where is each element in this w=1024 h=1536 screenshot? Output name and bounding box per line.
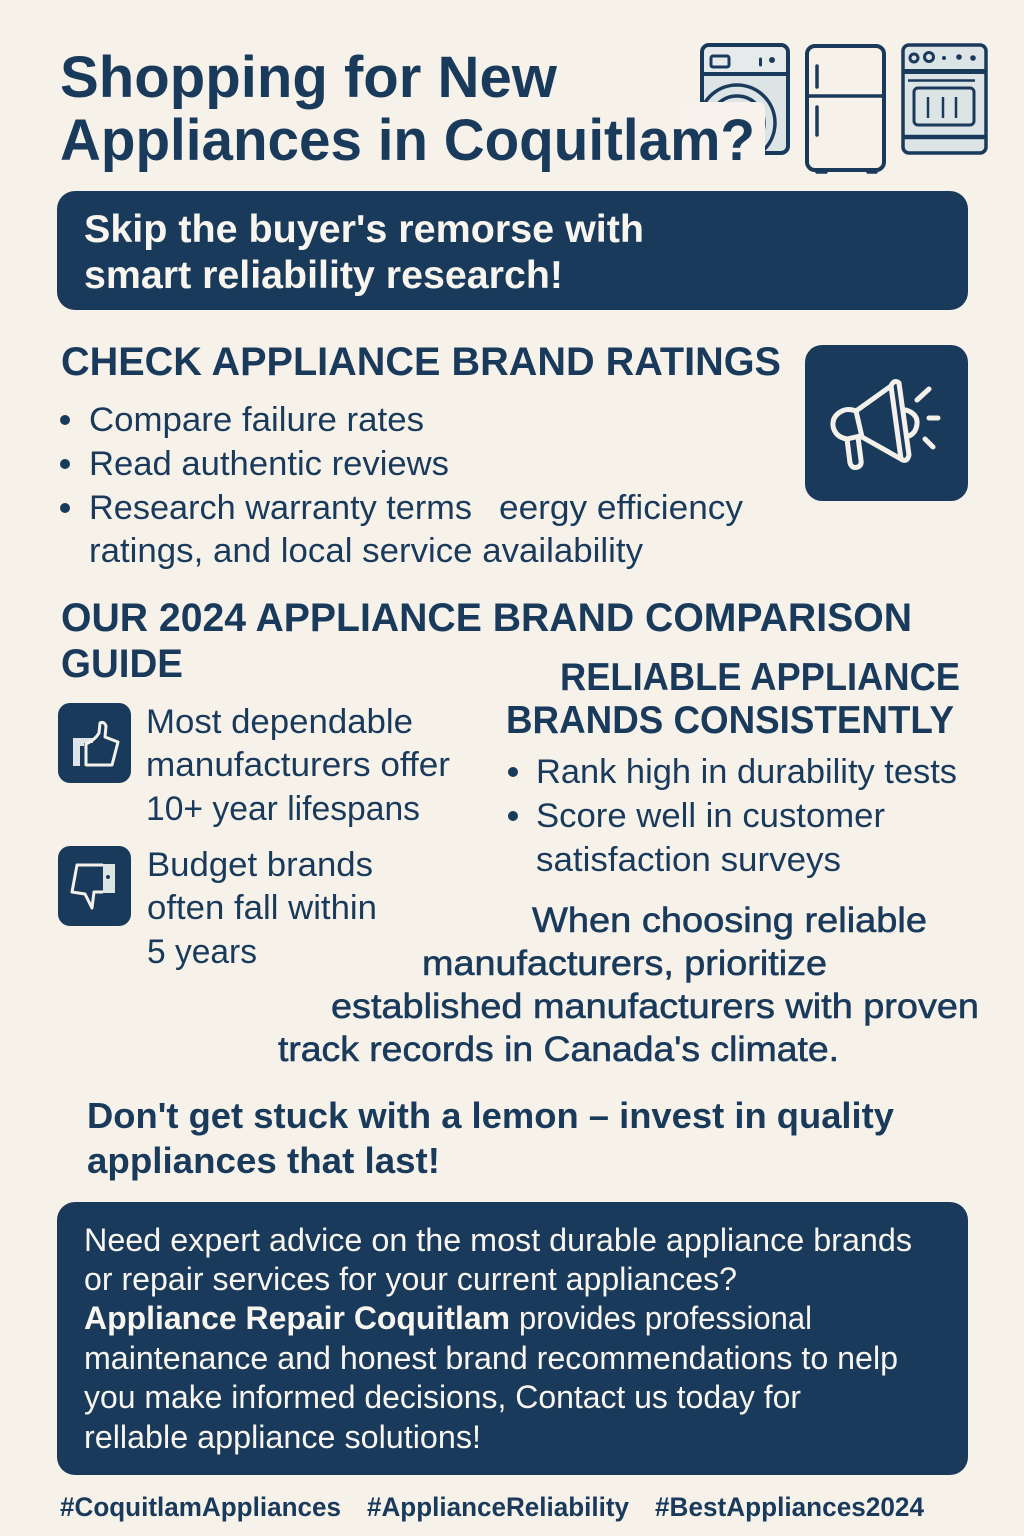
- text: budget brands: often fall within: [147, 889, 377, 927]
- text: choosing reliable manufacturers: track records in Canada's climate.: [278, 1030, 839, 1069]
- panel: contact call to action: Appliance Repair Coquitlam: [84, 1300, 510, 1336]
- list: brand rating tips: Read authentic reviews: [89, 445, 449, 483]
- heading: reliable appliance brands: BRANDS CONSISTENTLY: [506, 699, 954, 742]
- list: reliable brand traits: [508, 753, 957, 879]
- icon: thumbs down: [58, 846, 131, 926]
- banner: skip the buyer's remorse: [57, 191, 968, 310]
- heading: 2024 comparison guide: OUR 2024 APPLIANCE BRAND COMPARISON: [61, 596, 912, 640]
- heading: check appliance brand ratings: CHECK APPLIANCE BRAND RATINGS: [61, 340, 781, 384]
- callout: don't get stuck with a lemon: [87, 1095, 894, 1181]
- text: budget brands: 5 years: [147, 933, 257, 971]
- title background patch: [680, 102, 765, 164]
- text: dependable manufacturers: manufacturers offer: [146, 746, 450, 784]
- hashtags: #CoquitlamAppliances: [60, 1492, 341, 1522]
- hashtags: [60, 1492, 924, 1522]
- title: [60, 45, 755, 173]
- heading: 2024 comparison guide: [61, 596, 912, 686]
- icon: refrigerator: [807, 46, 884, 172]
- panel: contact call to action: or repair services for your current appliances?: [84, 1261, 737, 1297]
- text: choosing reliable manufacturers: established manufacturers with proven: [331, 987, 979, 1026]
- panel: contact call to action: you make informed decisions, Contact us today for: [84, 1379, 801, 1415]
- heading: 2024 comparison guide: GUIDE: [61, 642, 183, 686]
- icon: oven: [903, 45, 986, 153]
- callout: don't get stuck with a lemon: appliances that last!: [87, 1140, 440, 1181]
- text: budget brands: Budget brands: [147, 846, 373, 884]
- list: brand rating tips: eergy efficiency: [499, 489, 743, 527]
- list: brand rating tips: ratings, and local service availability: [89, 532, 643, 570]
- icon: washing machine: [699, 45, 788, 161]
- panel: contact call to action: rellable appliance solutions!: [84, 1419, 481, 1455]
- callout: don't get stuck with a lemon: Don't get stuck with a lemon – invest in quality: [87, 1095, 894, 1136]
- text: dependable manufacturers: 10+ year lifespans: [146, 790, 420, 828]
- text: choosing reliable manufacturers: When choosing reliable: [532, 901, 927, 940]
- panel: contact call to action: provides professional: [519, 1300, 812, 1336]
- icon: thumbs up: [58, 703, 131, 783]
- panel: contact call to action: maintenance and honest brand recommendations to nelp: [84, 1340, 898, 1376]
- list: brand rating tips: Compare failure rates: [89, 401, 424, 439]
- text: dependable manufacturers: [146, 703, 450, 828]
- hashtags: #ApplianceReliability: [367, 1492, 629, 1522]
- list: brand rating tips: [60, 401, 743, 570]
- banner: skip the buyer's remorse: smart reliability research!: [84, 254, 563, 297]
- panel: contact call to action: [57, 1202, 968, 1475]
- hashtags: #BestAppliances2024: [655, 1492, 924, 1522]
- icon: megaphone: [805, 345, 968, 501]
- text: choosing reliable manufacturers: manufacturers, prioritize: [422, 944, 827, 983]
- list: reliable brand traits: satisfaction surveys: [536, 841, 841, 879]
- banner: skip the buyer's remorse: Skip the buyer's remorse with: [84, 208, 644, 251]
- list: reliable brand traits: Rank high in durability tests: [536, 753, 957, 791]
- heading: reliable appliance brands: RELIABLE APPLIANCE: [560, 656, 960, 699]
- text: dependable manufacturers: Most dependable: [146, 703, 413, 741]
- list: brand rating tips: Research warranty terms: [89, 489, 472, 527]
- title: Shopping for New: [60, 45, 558, 110]
- panel: contact call to action: Need expert advice on the most durable appliance brands: [84, 1222, 912, 1258]
- heading: reliable appliance brands: [506, 656, 960, 742]
- title: Appliances in Coquitlam?: [60, 108, 755, 173]
- list: reliable brand traits: Score well in customer: [536, 797, 885, 835]
- text: budget brands: [147, 846, 377, 971]
- text: choosing reliable manufacturers: [278, 901, 979, 1069]
